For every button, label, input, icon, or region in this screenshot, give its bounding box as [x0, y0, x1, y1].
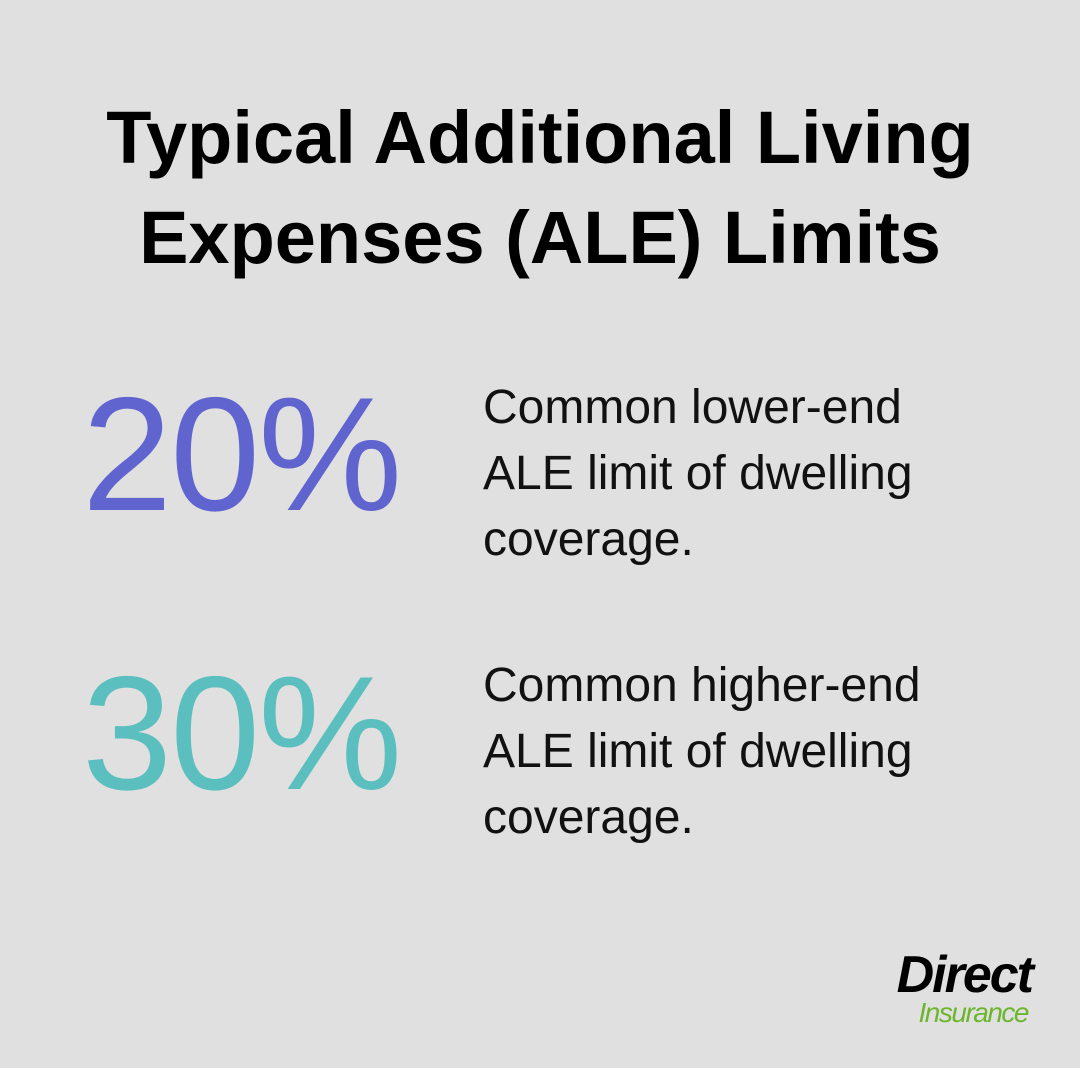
text: higher-end description: Common higher-end	[483, 659, 921, 712]
text: lower-end description: Common lower-end	[483, 381, 902, 434]
title: Typical Additional Living	[106, 96, 974, 179]
logo: Direct Insurance: Insurance	[919, 997, 1028, 1028]
title	[106, 96, 974, 279]
logo: Direct Insurance: Direct	[897, 946, 1032, 1004]
text: lower-end description: ALE limit of dwelling	[483, 447, 913, 500]
text: lower-end description	[483, 381, 913, 566]
text: higher-end description: coverage.	[483, 791, 694, 844]
text: lower-end description: coverage.	[483, 513, 694, 566]
stat: 30%: 30%	[82, 643, 400, 824]
logo: Direct Insurance	[897, 946, 1036, 1028]
stat: 20%: 20%	[82, 364, 400, 545]
text: higher-end description	[483, 659, 921, 844]
text: higher-end description: ALE limit of dwelling	[483, 725, 913, 778]
title: Expenses (ALE) Limits	[139, 196, 941, 279]
